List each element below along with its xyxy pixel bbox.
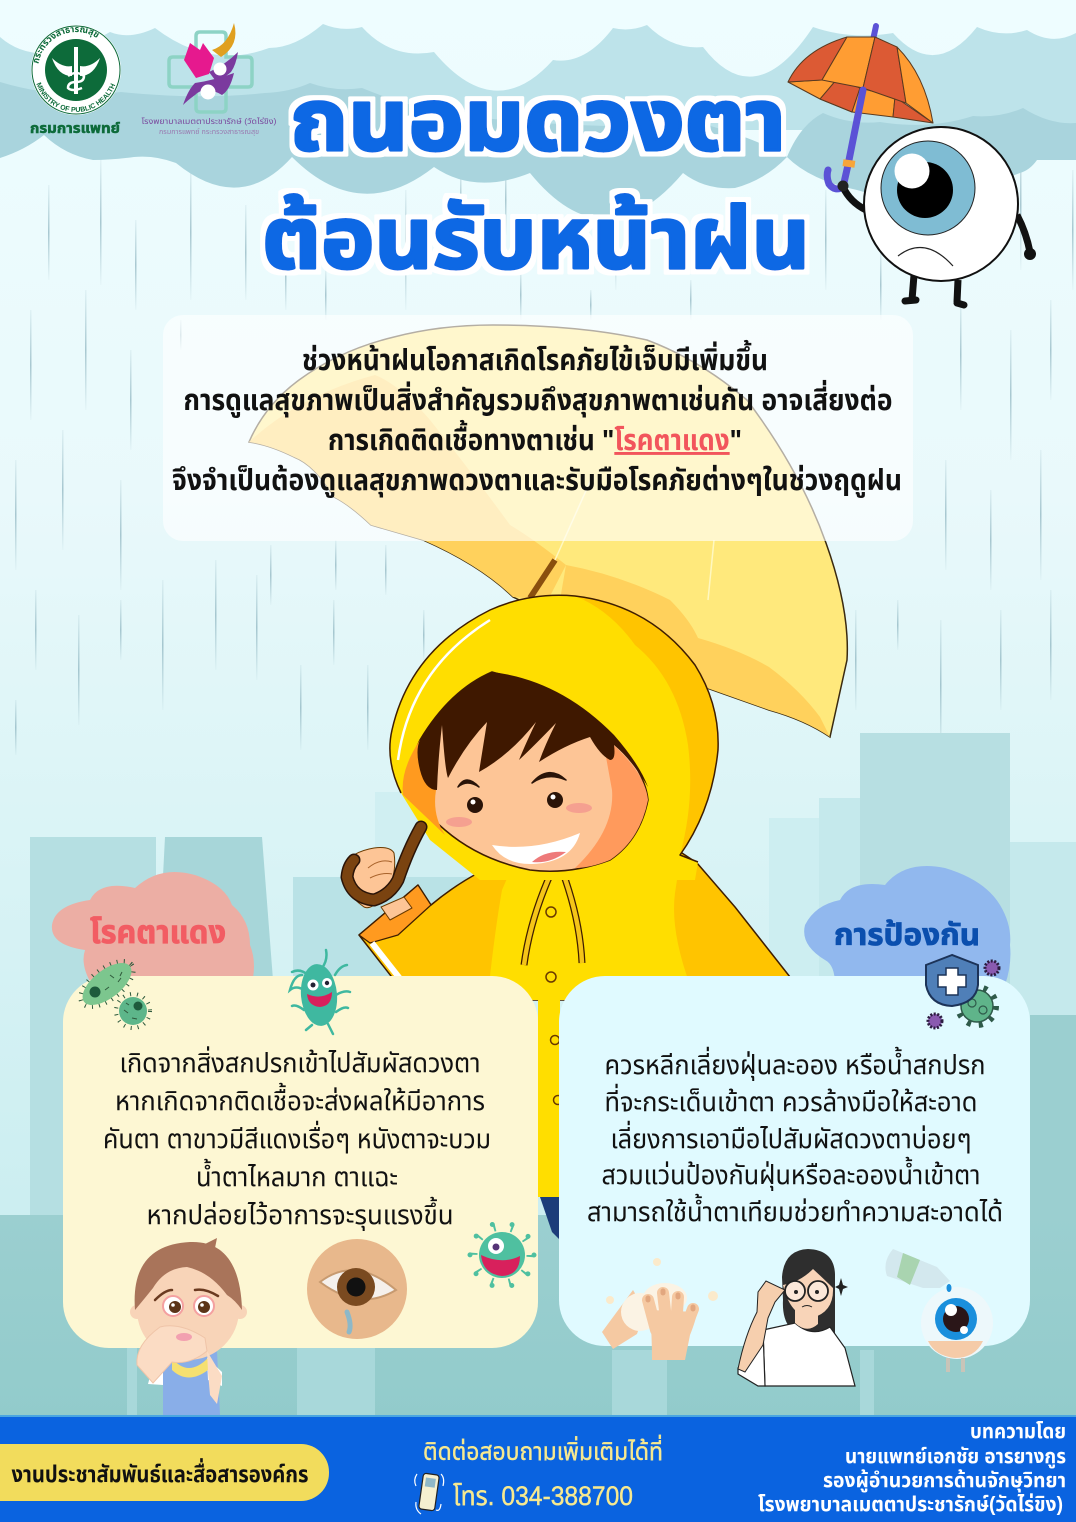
- card text: เกิดจากสิ่งสกปรกเข้าไปสัมผัสดวงตา: [120, 1046, 480, 1078]
- child in yellow raincoat: [343, 595, 795, 1240]
- title line 1: ถนอมดวงตา: [290, 73, 786, 169]
- face opening: [405, 672, 648, 871]
- city skyline: [0, 733, 1076, 1420]
- upper cloud layer: [0, 24, 1076, 130]
- phone number: โทร. 034-388700: [453, 1481, 633, 1511]
- hood: [390, 595, 718, 880]
- department pill: [0, 1444, 329, 1501]
- eyeball mascot with umbrella: [788, 26, 1036, 305]
- contact text: ติดต่อสอบถามเพิ่มเติมได้ที่: [423, 1434, 663, 1466]
- card text: สามารถใช้น้ำตาเทียมช่วยทำความสะอาดได้: [587, 1193, 1003, 1227]
- intro text: การดูแลสุขภาพเป็นสิ่งสำคัญรวมถึงสุขภาพตาเช่นกัน อาจเสี่ยงต่อ: [184, 379, 892, 418]
- illustration: girl with glasses: [738, 1249, 855, 1386]
- icon: smiling germ: [290, 950, 350, 1034]
- panel: prevention card: [559, 955, 1030, 1386]
- hair: [418, 672, 648, 790]
- logo: hospital: [142, 23, 277, 137]
- clouds: [0, 24, 1076, 219]
- logo: hospital: กรมการแพทย์ กระทรวงสาธารณสุข: [159, 128, 259, 137]
- logo: ministry of public health: กรมการแพทย์: [30, 120, 120, 136]
- card text: [103, 1046, 491, 1231]
- icon: virus monster: [470, 1223, 534, 1287]
- panel: conjunctivitis card: [63, 950, 538, 1415]
- intro text: การเกิดติดเชื้อทางตาเช่น "โรคตาแดง": [328, 419, 742, 457]
- title: [262, 73, 810, 287]
- cloud label: prevention: การป้องกัน: [834, 919, 980, 952]
- coat strings and buttons: [524, 873, 582, 965]
- intro text: ช่วงหน้าฝนโอกาสเกิดโรคภัยไข้เจ็บมีเพิ่มขึ้น: [302, 339, 768, 377]
- card text: เลี่ยงการเอามือไปสัมผัสดวงตาบ่อยๆ: [610, 1120, 972, 1154]
- department pill: งานประชาสัมพันธ์และสื่อสารองค์กร: [12, 1458, 309, 1487]
- author credit: รองผู้อำนวยการด้านจักษุวิทยา: [823, 1470, 1066, 1492]
- author credit: นายแพทย์เอกชัย อารยางกูร: [845, 1446, 1066, 1468]
- author credit: โรงพยาบาลเมตตาประชารักษ์(วัดไร่ขิง): [758, 1494, 1063, 1516]
- card text: หากปล่อยไว้อาการจะรุนแรงขึ้น: [146, 1196, 454, 1231]
- eyeball: [864, 127, 1018, 281]
- small umbrella canopy: [788, 37, 933, 123]
- rain: [15, 140, 1074, 755]
- logo: ministry of public health: [30, 25, 121, 136]
- card text: น้ำตาไหลมาก ตาแฉะ: [196, 1158, 398, 1192]
- card text: ที่จะกระเด็นเข้าตา ควรล้างมือให้สะอาด: [604, 1083, 978, 1117]
- small umbrella tip: [873, 26, 876, 40]
- icon: mobile phone: [415, 1473, 444, 1514]
- lower coat between cards: [538, 970, 560, 1197]
- illustration: washing hands: [602, 1258, 718, 1360]
- lower cloud layer: [0, 82, 1076, 219]
- card text: หากเกิดจากติดเชื้อจะส่งผลให้มีอาการ: [115, 1082, 485, 1116]
- icon: shield and virus: [926, 955, 999, 1028]
- intro text: จึงจำเป็นต้องดูแลสุขภาพดวงตาและรับมือโรคภัยต่างๆในช่วงฤดูฝน: [172, 465, 902, 498]
- author credit: บทความโดย: [970, 1421, 1066, 1443]
- title line 2: ต้อนรับหน้าฝน: [262, 191, 810, 287]
- card text: สวมแว่นป้องกันฝุ่นหรือละอองน้ำเข้าตา: [602, 1156, 980, 1191]
- wrist: [381, 897, 412, 920]
- cloud label: prevention: [804, 866, 1010, 985]
- eyes and brows: [467, 797, 483, 813]
- card text: [587, 1046, 1003, 1227]
- footer band: [0, 1415, 1076, 1522]
- illustration: irritated eye: [307, 1239, 407, 1339]
- intro panel: [163, 315, 913, 541]
- small umbrella handle: [827, 90, 863, 189]
- logo: ministry of public health: กระทรวงสาธารณสุข: [34, 27, 99, 64]
- logo: hospital: โรงพยาบาลเมตตาประชารักษ์ (วัดไร่ขิง): [142, 116, 277, 126]
- arms and legs: [843, 187, 1030, 302]
- card text: ควรหลีกเลี่ยงฝุ่นละออง หรือน้ำสกปรก: [604, 1046, 986, 1081]
- author credit: [758, 1421, 1066, 1516]
- coat body: [359, 845, 795, 1000]
- icon: bacteria pair: [73, 953, 150, 1028]
- sleeve cuff: [359, 885, 431, 943]
- smile: [492, 833, 580, 864]
- illustration: eye drops: [885, 1249, 993, 1372]
- cloud label: conjunctivitis: โรคตาแดง: [90, 914, 226, 950]
- card text: คันตา ตาขาวมีสีแดงเรื่อๆ หนังตาจะบวม: [103, 1120, 491, 1154]
- cloud label: conjunctivitis: [52, 872, 254, 990]
- hand and umbrella handle: [343, 848, 395, 908]
- illustration: crying child: [130, 1238, 247, 1415]
- logo: ministry of public health: MINISTRY OF PUBLIC HEALTH: [36, 82, 116, 112]
- big yellow umbrella: [249, 325, 847, 737]
- intro text: [172, 339, 902, 498]
